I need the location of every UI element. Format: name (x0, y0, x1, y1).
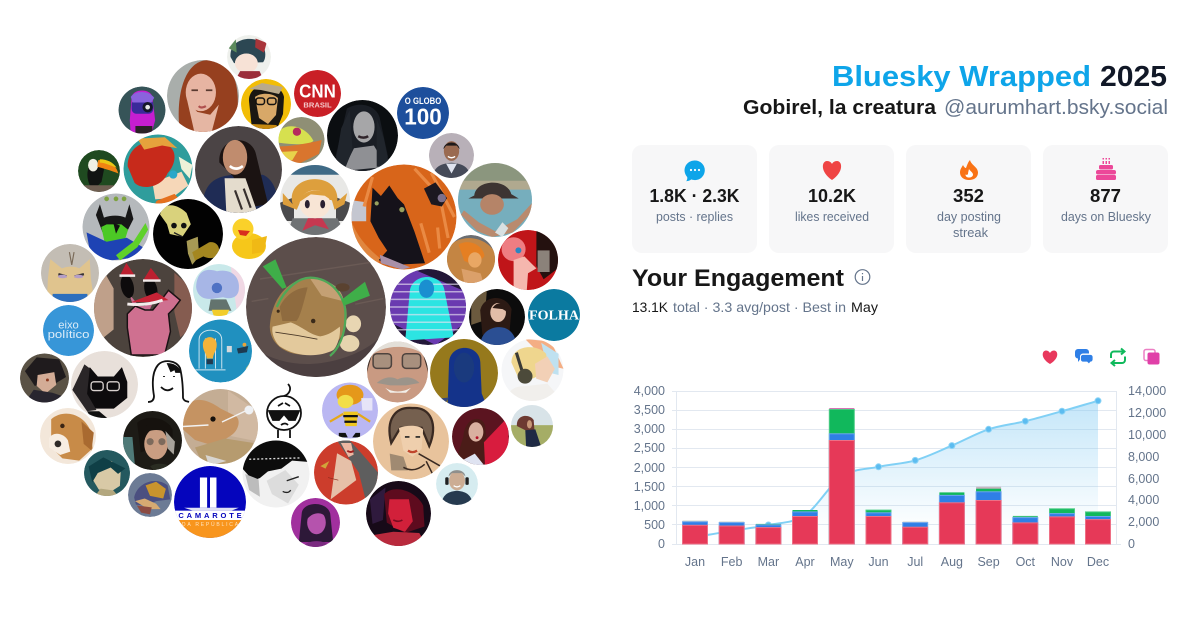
avatar: eixo politico logo: eixo (58, 319, 79, 331)
month labels: Dec (1087, 555, 1109, 569)
left axis labels: 3,500 (634, 403, 665, 417)
avatar: anime with dark hair (20, 354, 69, 402)
avatar: teal-toned anime (84, 450, 130, 496)
avatar: red-haired anime (124, 134, 192, 204)
avatar: eixo politico logo: político (48, 329, 89, 341)
avatar: woman with red fan (452, 408, 509, 465)
left axis labels (634, 384, 665, 551)
avatar: CNN Brasil logo: CNN (299, 80, 336, 101)
month labels: Nov (1051, 555, 1074, 569)
right axis labels: 0 (1128, 537, 1135, 551)
gridlines (672, 391, 1121, 544)
stat card: days on Bluesky: days on Bluesky (1061, 209, 1151, 224)
avatar: long-haired woman with fringe (123, 411, 182, 470)
stacked bars (682, 408, 1110, 544)
stat card: posts and replies: 1.8K · 2.3K (650, 186, 740, 206)
icon: chat bubble (685, 160, 705, 181)
avatar: woman in red light (366, 481, 431, 546)
left axis labels: 2,500 (634, 441, 665, 455)
avatar: toucan (78, 150, 120, 192)
left axis labels: 2,000 (634, 461, 665, 475)
avatar: O Globo 100 logo: 100 (404, 103, 442, 129)
avatar: woman by the pool (458, 163, 532, 237)
bar: Jan (682, 520, 708, 544)
engagement summary: May (851, 299, 878, 315)
avatar: golden dog (40, 408, 96, 464)
avatar: goth woman (327, 100, 398, 171)
month labels: Jan (685, 555, 705, 569)
avatar: blue madonna on gold (430, 339, 498, 407)
avatar: dinosaur on blue (128, 473, 172, 517)
avatar: Camarote da República logo: CAMAROTE (178, 511, 242, 520)
icon: reposts legend (1111, 348, 1125, 366)
month labels: Feb (721, 555, 743, 569)
icon: flame (960, 160, 978, 180)
line points (765, 398, 1101, 528)
chart legend (1043, 348, 1160, 366)
month labels: Jul (907, 555, 923, 569)
icon: stick figure in sunglasses (267, 384, 301, 438)
month labels: Mar (758, 555, 779, 569)
avatar: blonde in headphones (502, 339, 564, 401)
stat card: streak (906, 145, 1031, 253)
avatar: green monster on grey (82, 194, 150, 260)
right axis labels: 10,000 (1128, 428, 1166, 442)
icon: birthday cake (1096, 158, 1116, 180)
user name and handle (743, 97, 1168, 119)
avatar: man with headset (436, 463, 478, 505)
avatar: Folha logo: FOLHA (529, 308, 579, 323)
avatar: blue-haired figure (193, 264, 245, 316)
avatar: O Globo 100 logo (397, 87, 449, 139)
icon: likes legend (1043, 350, 1057, 364)
avatar: orange fantasy girl (447, 235, 495, 283)
right axis labels: 2,000 (1128, 515, 1159, 529)
icon: replies legend (1075, 349, 1093, 364)
stat card: likes: 10.2K (808, 186, 856, 206)
right axis labels: 8,000 (1128, 450, 1159, 464)
avatar: bee character (322, 382, 378, 438)
avatar: redhead with hand on chin (167, 60, 239, 132)
avatar: black cat with glasses (71, 351, 138, 418)
stat card: likes: likes received (795, 209, 869, 224)
avatar: woman in red dress (314, 440, 378, 504)
engagement chart (634, 384, 1166, 569)
avatar: trumpet skeleton (153, 199, 223, 269)
stat card: likes (769, 145, 894, 253)
avatar: purple-tinted girl (291, 498, 340, 547)
avatar: pink creature with Santa hats (94, 259, 192, 357)
avatar: man in suit (429, 133, 474, 178)
engagement summary (632, 299, 878, 315)
avatar: Camarote da República logo: DA REPÚBLICA (182, 521, 239, 528)
avatar: dark-haired woman (469, 289, 525, 345)
right axis labels: 4,000 (1128, 493, 1159, 507)
avatar: Shrek-horn plush (246, 237, 386, 377)
avatar: ink portrait on peach (373, 404, 449, 480)
avatar: chibi girl (227, 35, 271, 79)
right axis labels: 6,000 (1128, 472, 1159, 486)
left axis labels: 1,500 (634, 480, 665, 494)
left axis labels: 4,000 (634, 384, 665, 398)
title: 2025 (1100, 61, 1167, 93)
month labels: Aug (941, 555, 963, 569)
bar: Nov (1050, 509, 1074, 544)
avatar: Camarote da República logo (174, 466, 246, 538)
icon: quotes legend (1144, 350, 1160, 364)
avatar: purple robot (118, 86, 166, 134)
avatar: lime rat with headphones (278, 117, 324, 163)
icon: line-drawn girl (148, 361, 189, 402)
title: Bluesky Wrapped (832, 61, 1091, 93)
stat card: posts and replies: posts · replies (656, 209, 733, 224)
avatar cluster (20, 35, 580, 547)
avatar: CNN Brasil logo: BRASIL (303, 101, 332, 110)
stat card: streak: streak (953, 225, 988, 240)
avatar: glasses character on yellow (241, 79, 291, 129)
bar: Jul (903, 521, 928, 544)
month labels: Apr (795, 555, 815, 569)
avatar: manga girl (242, 440, 310, 508)
month labels: Sep (977, 555, 1000, 569)
left axis labels: 1,000 (634, 499, 665, 513)
avatar: O Globo 100 logo: O GLOBO (405, 96, 441, 106)
month labels: Jun (868, 555, 889, 569)
bar: May (829, 408, 854, 544)
stat card: posts and replies (632, 145, 757, 253)
stat card: streak: day posting (937, 209, 1001, 224)
month labels (685, 555, 1109, 569)
user name and handle: @aurumhart.bsky.social (944, 97, 1168, 119)
bar: Oct (1013, 516, 1038, 544)
avatar: hamster with cotton swabs (183, 389, 258, 464)
stat card: streak: 352 (953, 186, 984, 206)
avatar: businesswoman (195, 126, 282, 213)
avatar: pink figurine in red room (498, 230, 558, 290)
user name and handle: Gobirel, la creatura (743, 97, 937, 119)
left axis labels: 0 (658, 537, 665, 551)
right axis labels: 14,000 (1128, 384, 1166, 398)
bar: Aug (939, 492, 964, 544)
cumulative line (695, 401, 1098, 537)
month labels: Oct (1016, 555, 1036, 569)
bar: Sep (976, 487, 1001, 544)
right axis labels (1128, 384, 1166, 551)
avatar: lightbulb in cage (189, 320, 252, 382)
month labels: May (830, 555, 854, 569)
engagement summary: total · 3.3 avg/post · Best in (673, 299, 846, 315)
avatar: grandpa with glasses and moustache (367, 342, 428, 402)
icon: heart (823, 161, 841, 180)
engagement summary: 13.1K (632, 299, 669, 315)
avatar: cat character on beige (41, 244, 99, 302)
avatar: CNN Brasil logo (294, 70, 341, 117)
bar: Dec (1086, 512, 1110, 544)
avatar: neon glitch figure (390, 269, 466, 345)
bar: Mar (756, 524, 781, 544)
avatar: Folha logo (528, 289, 580, 341)
icon: rubber duck (232, 218, 267, 259)
avatar: blonde anime girl (280, 165, 350, 235)
left axis labels: 3,000 (634, 422, 665, 436)
avatar: woman in a field (511, 405, 553, 447)
avatar: eixo politico logo (43, 305, 94, 356)
left axis labels: 500 (644, 518, 665, 532)
icon: info (855, 270, 870, 284)
right axis labels: 12,000 (1128, 406, 1166, 420)
stat card: days on Bluesky: 877 (1090, 186, 1121, 206)
bar: Jun (866, 510, 891, 544)
heading: Your Engagement: Your Engagement (632, 265, 844, 292)
stat card: days on Bluesky (1043, 145, 1168, 253)
cumulative area (695, 401, 1098, 544)
bar: Apr (792, 510, 818, 544)
avatar: black cat in orange wig (352, 164, 456, 270)
bar: Feb (719, 521, 744, 544)
